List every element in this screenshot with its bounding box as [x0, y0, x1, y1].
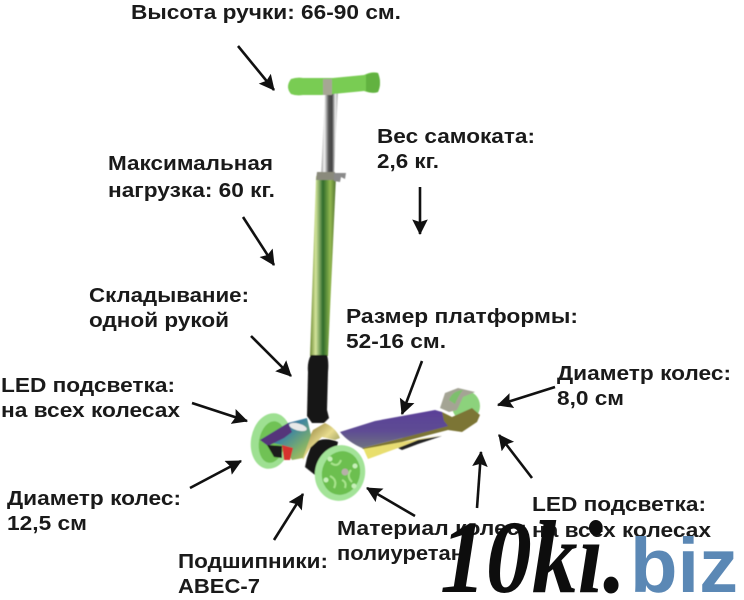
- arrow: platform size: [402, 361, 422, 414]
- front hub: [302, 423, 340, 475]
- label: folding: [89, 284, 249, 332]
- rear wheel and fender: [440, 388, 480, 421]
- label: LED front: на всех колесах: [1, 399, 181, 422]
- arrow: handle height: [238, 46, 274, 90]
- arrow: bearings: [274, 494, 303, 540]
- arrows: [190, 46, 555, 540]
- deck top: [340, 410, 448, 448]
- arrow: wheel diameter rear: [498, 387, 555, 405]
- label: wheel diameter rear: [557, 362, 731, 410]
- front right wheel: [309, 439, 371, 507]
- label: scooter weight: [377, 125, 535, 173]
- label: platform size: 52-16 см.: [346, 330, 446, 353]
- label: LED rear: [532, 493, 712, 542]
- label: max load: Максимальная: [108, 152, 273, 175]
- label: platform size: [346, 305, 578, 353]
- label: scooter weight: Вес самоката:: [377, 125, 535, 148]
- label: LED rear: LED подсветка:: [532, 493, 706, 516]
- handlebar grips: [288, 72, 380, 95]
- label: max load: нагрузка: 60 кг.: [108, 179, 275, 202]
- label: wheel diameter front: 12,5 см: [7, 512, 87, 535]
- label: LED front: [1, 374, 181, 422]
- label: wheel material: Материал колес:: [337, 517, 527, 540]
- label: handle height: Высота ручки: 66-90 см.: [131, 1, 401, 24]
- label: scooter weight: 2,6 кг.: [377, 150, 439, 173]
- front fork with logo: [260, 418, 311, 460]
- label: LED rear: на всех колесах: [532, 519, 712, 542]
- label: platform size: Размер платформы:: [346, 305, 578, 328]
- arrow: LED front: [192, 403, 247, 421]
- label: wheel diameter rear: 8,0 см: [557, 387, 624, 410]
- arrow: wheel diameter front: [190, 461, 241, 488]
- label: wheel diameter front: Диаметр колес:: [7, 487, 181, 510]
- folding joint: [307, 355, 329, 423]
- label: folding: одной рукой: [89, 309, 229, 332]
- label: wheel diameter front: [7, 487, 181, 535]
- arrow: scooter weight: [419, 187, 421, 234]
- label: LED front: LED подсветка:: [1, 374, 175, 397]
- label: wheel material: полиуретан: [337, 542, 464, 565]
- arrow: max load: [243, 217, 274, 265]
- arrow: wheel material 2: [477, 452, 481, 508]
- front left wheel: [246, 410, 296, 472]
- label: bearings: [178, 550, 328, 598]
- scooter illustration: [246, 72, 480, 507]
- arrow: folding: [251, 336, 291, 376]
- label: bearings: ABEC-7: [178, 575, 260, 598]
- handlebar stem: [310, 90, 346, 356]
- label: max load: [108, 152, 275, 202]
- arrow: wheel material: [367, 488, 415, 516]
- label: folding: Складывание:: [89, 284, 249, 307]
- label: wheel diameter rear: Диаметр колес:: [557, 362, 731, 385]
- label: wheel material: [337, 517, 527, 565]
- deck underside: [363, 435, 442, 459]
- arrow: LED rear: [499, 435, 532, 478]
- deck rear fork: [362, 408, 480, 449]
- label: bearings: Подшипники:: [178, 550, 328, 573]
